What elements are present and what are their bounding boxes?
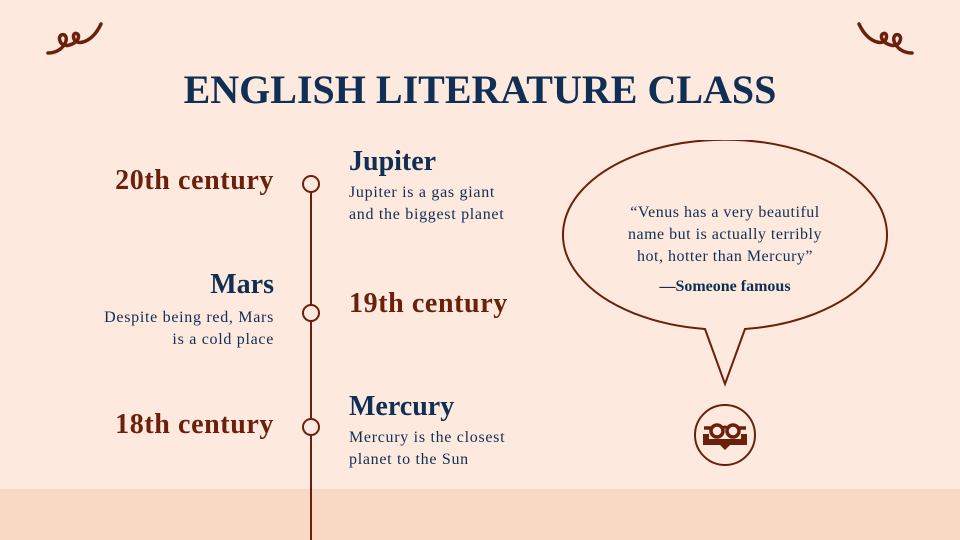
item: Mars: Mars	[210, 269, 274, 300]
item: Mars: is a cold place	[172, 331, 274, 348]
item: Jupiter: and the biggest planet	[349, 206, 504, 223]
decoration: right squiggle	[857, 22, 914, 55]
speech bubble	[562, 140, 888, 387]
item: Mars	[104, 269, 274, 348]
label: 19th century: 19th century	[349, 288, 508, 319]
item: Jupiter: Jupiter	[349, 146, 436, 177]
item: Mars: Despite being red, Mars	[104, 309, 274, 326]
icon: book with glasses	[694, 404, 756, 466]
item: Jupiter	[349, 146, 504, 223]
quote: name but is actually terribly	[628, 226, 822, 243]
quote	[628, 204, 822, 295]
item: Jupiter: Jupiter is a gas giant	[349, 184, 495, 201]
title: ENGLISH LITERATURE CLASS	[184, 67, 776, 112]
label: 20th century: 20th century	[115, 165, 274, 196]
bottom band	[0, 489, 960, 540]
quote: —Someone famous	[659, 278, 791, 295]
label: 18th century: 18th century	[115, 409, 274, 440]
item: Mercury	[349, 391, 505, 468]
decoration: left squiggle	[46, 22, 103, 55]
item: Mercury: planet to the Sun	[349, 451, 469, 468]
item: Mercury: Mercury	[349, 391, 454, 422]
item: Mercury: Mercury is the closest	[349, 429, 505, 446]
quote: “Venus has a very beautiful	[630, 204, 820, 221]
quote: hot, hotter than Mercury”	[637, 248, 813, 265]
